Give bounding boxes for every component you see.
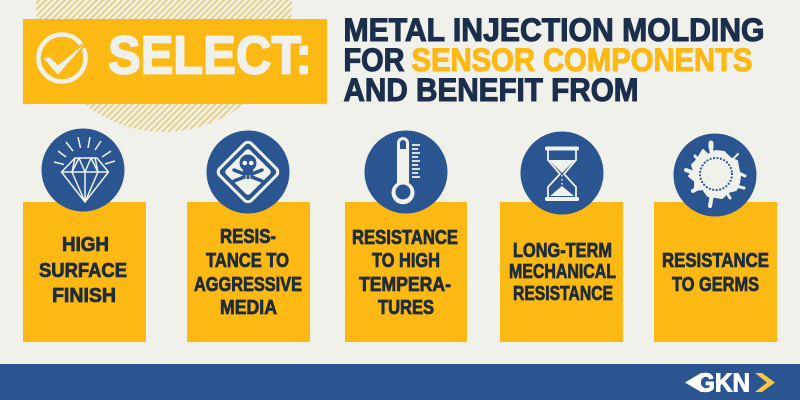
banner word: SELECT: xyxy=(108,26,312,86)
panel: long-term mechanical resistance: RESISTANCE xyxy=(513,283,613,305)
panel: resistance to aggressive media: TANCE TO xyxy=(206,250,289,272)
panel: high surface finish: SURFACE xyxy=(39,260,127,282)
title: AND BENEFIT FROM xyxy=(344,72,638,108)
title xyxy=(344,12,764,108)
icon: check mark in circle xyxy=(38,34,93,82)
icon: skull warning sign xyxy=(206,130,290,214)
panel: long-term mechanical resistance: MECHANICAL xyxy=(509,261,616,283)
panel: resistance to germs xyxy=(654,202,777,342)
panel: resistance to germs: TO GERMS xyxy=(672,274,759,296)
select banner xyxy=(23,19,327,104)
panel: resistance to aggressive media: AGGRESSIVE xyxy=(194,274,302,296)
panel: high surface finish: HIGH xyxy=(62,234,109,256)
hatched circle behind select banner xyxy=(36,0,292,132)
logo: GKN xyxy=(685,368,775,398)
panel: resistance to aggressive media xyxy=(187,202,310,342)
icon: diamond xyxy=(42,128,124,212)
title: METAL INJECTION MOLDING xyxy=(344,12,764,48)
panel: resistance to aggressive media: MEDIA xyxy=(220,297,277,319)
footer bar xyxy=(0,364,800,400)
panel: resistance to germs: RESISTANCE xyxy=(662,250,769,272)
panel: resistance to high temperatures: TEMPERA- xyxy=(359,274,451,296)
title: FOR xyxy=(344,42,404,78)
panel: resistance to high temperatures: TO HIGH xyxy=(372,250,440,272)
panel: resistance to high temperatures: RESISTANCE xyxy=(352,227,458,249)
panel: resistance to high temperatures xyxy=(345,202,467,342)
panel: long-term mechanical resistance: LONG-TERM xyxy=(513,240,612,262)
icon: germ xyxy=(674,134,756,216)
icon: hourglass xyxy=(520,132,604,214)
panel: high surface finish xyxy=(23,202,146,342)
panel: resistance to aggressive media: RESIS- xyxy=(220,226,276,248)
icon: thermometer xyxy=(364,130,448,214)
panel: long-term mechanical resistance xyxy=(500,202,623,342)
panel: resistance to high temperatures: TURES xyxy=(378,297,434,319)
logo: GKN: GKN xyxy=(696,368,750,398)
panel: high surface finish: FINISH xyxy=(52,285,116,307)
title: SENSOR COMPONENTS xyxy=(412,42,752,78)
